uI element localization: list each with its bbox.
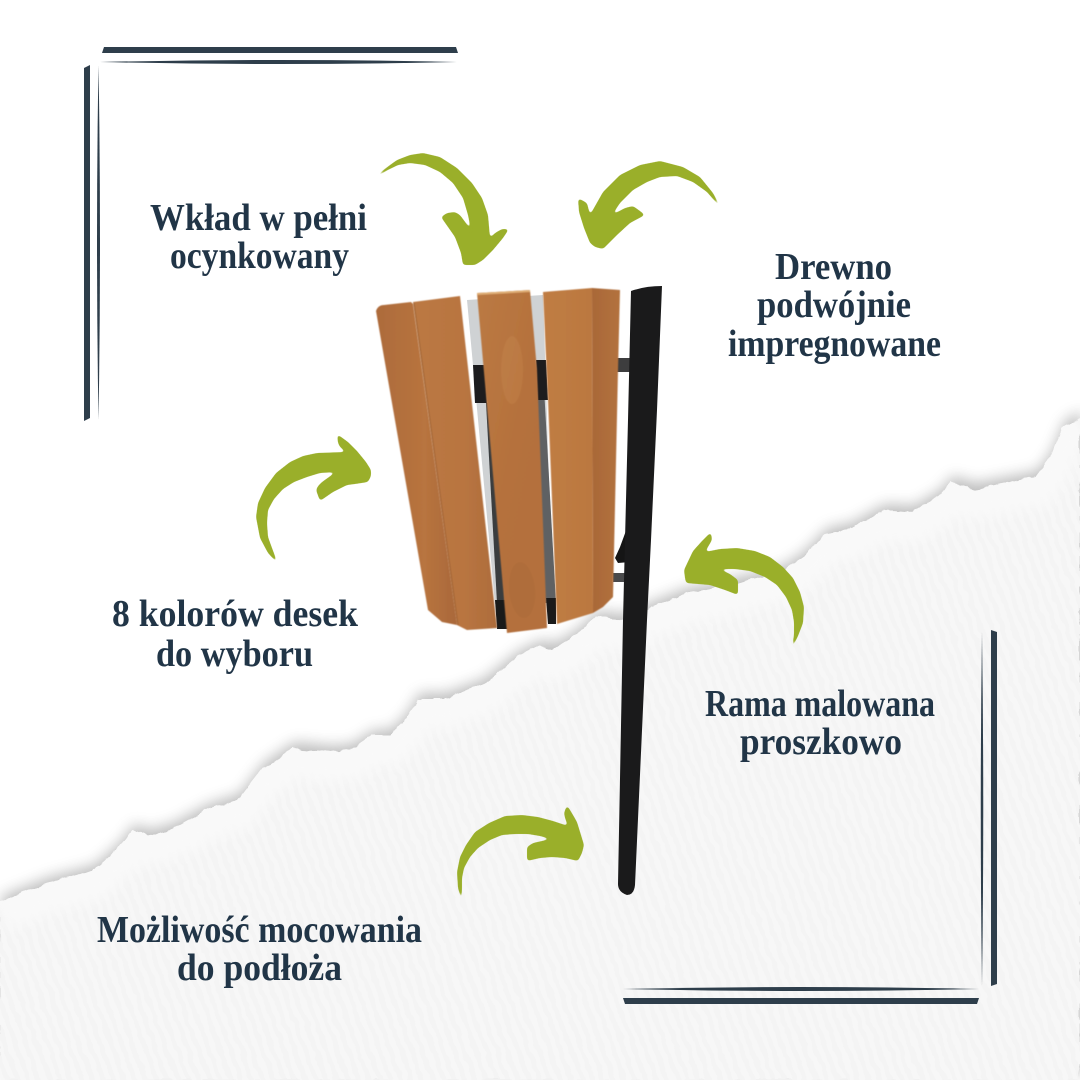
label: board colours xyxy=(112,593,359,675)
label: impregnated wood: podwójnie xyxy=(757,284,911,326)
arrow: bottom, towards post base xyxy=(457,805,584,903)
arrow: middle left, towards slats xyxy=(256,434,371,564)
label: impregnated wood: impregnowane xyxy=(728,323,941,365)
corner frame: bottom right xyxy=(623,630,997,1004)
product photo: wooden litter bin on a post xyxy=(376,286,662,895)
corner frame: top left xyxy=(84,47,458,421)
label: impregnated wood: Drewno xyxy=(775,246,892,288)
label: board colours: 8 kolorów desek xyxy=(112,593,359,635)
arrow: middle right, towards frame xyxy=(684,532,804,651)
torn paper background xyxy=(0,411,1080,1080)
inner galvanised liner xyxy=(467,295,556,629)
label: board colours: do wyboru xyxy=(156,633,313,675)
steel post and brackets xyxy=(613,286,662,895)
label: ground mounting: do podłoża xyxy=(177,947,342,989)
arrow: top left, towards liner xyxy=(374,153,509,265)
wood slats xyxy=(376,288,620,633)
arrow: top right, towards wood xyxy=(578,161,722,249)
label: powder coated frame xyxy=(705,683,935,763)
label: galvanised insert: ocynkowany xyxy=(170,235,349,277)
label: powder coated frame: proszkowo xyxy=(740,721,902,763)
label: impregnated wood xyxy=(728,246,941,365)
label: powder coated frame: Rama malowana xyxy=(705,683,935,725)
label: galvanised insert: Wkład w pełni xyxy=(150,197,367,239)
label: ground mounting: Możliwość mocowania xyxy=(97,909,422,951)
label: galvanised insert xyxy=(150,197,367,277)
label: ground mounting xyxy=(97,909,422,989)
